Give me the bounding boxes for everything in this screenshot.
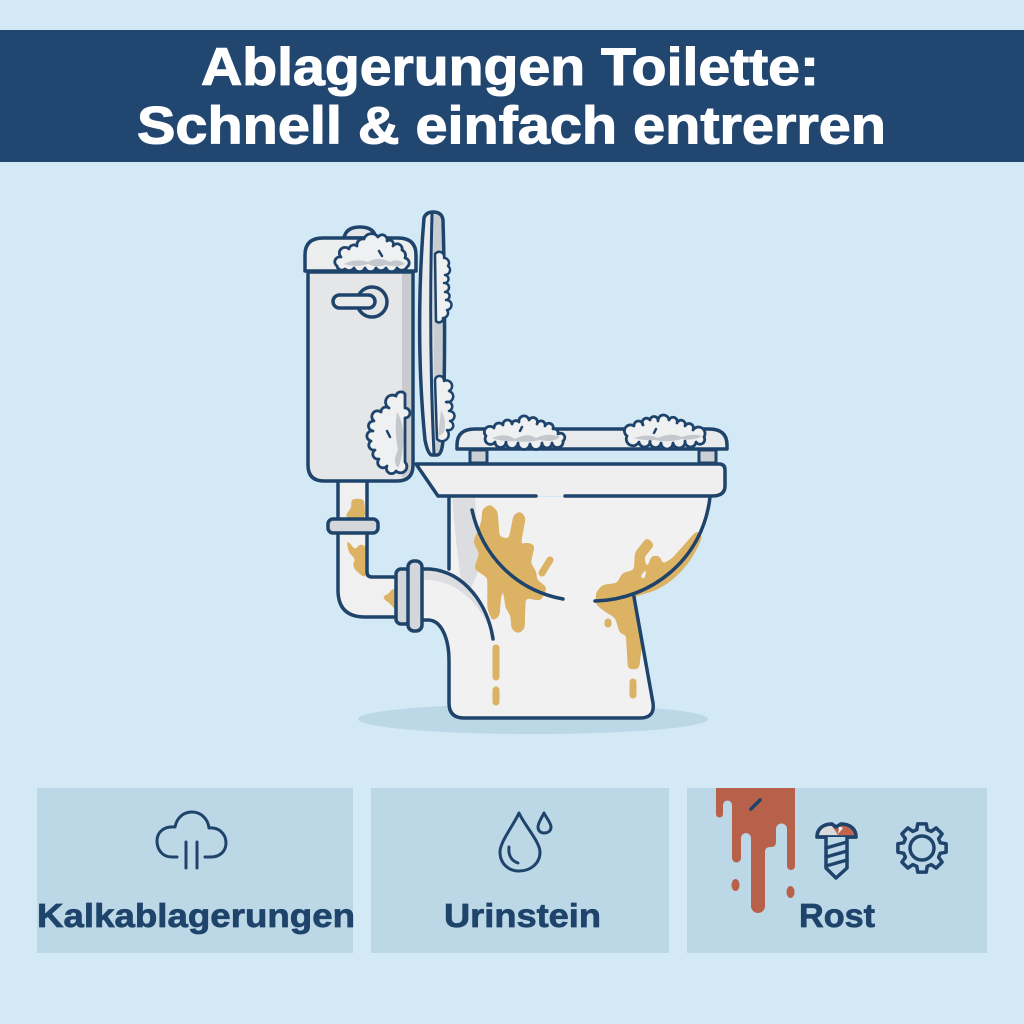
drain pipe — [328, 480, 400, 617]
limescale on cistern lid — [335, 234, 409, 272]
bowl outlines — [422, 497, 710, 718]
toilet bowl and base — [422, 497, 710, 718]
panel: Rost — [687, 788, 987, 953]
icon: cloud — [157, 812, 226, 868]
pipe flange — [396, 561, 422, 631]
label: Rost — [799, 897, 875, 934]
cistern bump — [344, 227, 376, 238]
title banner — [0, 30, 1024, 162]
limescale on cistern side — [367, 392, 410, 474]
seat hinges — [470, 450, 716, 463]
raised toilet lid — [420, 212, 444, 455]
icon: rusty screw — [817, 824, 856, 878]
title line 2: Schnell & einfach entrerren — [137, 96, 886, 156]
cistern lid — [305, 238, 416, 271]
stain drips — [496, 560, 633, 702]
toilet seat — [457, 429, 727, 449]
pipe collar — [328, 519, 378, 533]
icon: water drops — [500, 813, 551, 871]
label: Kalkablagerungen — [37, 897, 355, 934]
panel: Kalkablagerungen — [37, 788, 355, 953]
label: Urinstein — [444, 897, 601, 934]
icon: gear — [898, 824, 946, 872]
right stain — [597, 532, 701, 668]
floor shadow — [358, 704, 708, 734]
left stain — [475, 506, 545, 632]
rust drip — [716, 788, 795, 913]
cistern body — [308, 272, 413, 481]
limescale on seat left — [484, 416, 565, 450]
toilet rim — [416, 464, 725, 496]
title line 1: Ablagerungen Toilette: — [201, 38, 819, 97]
limescale on seat right — [624, 415, 705, 449]
flush handle — [333, 287, 387, 317]
limescale on lid lower — [435, 376, 455, 441]
panel: Urinstein — [371, 788, 669, 953]
limescale on lid upper — [435, 252, 452, 322]
toilet illustration — [305, 212, 727, 734]
